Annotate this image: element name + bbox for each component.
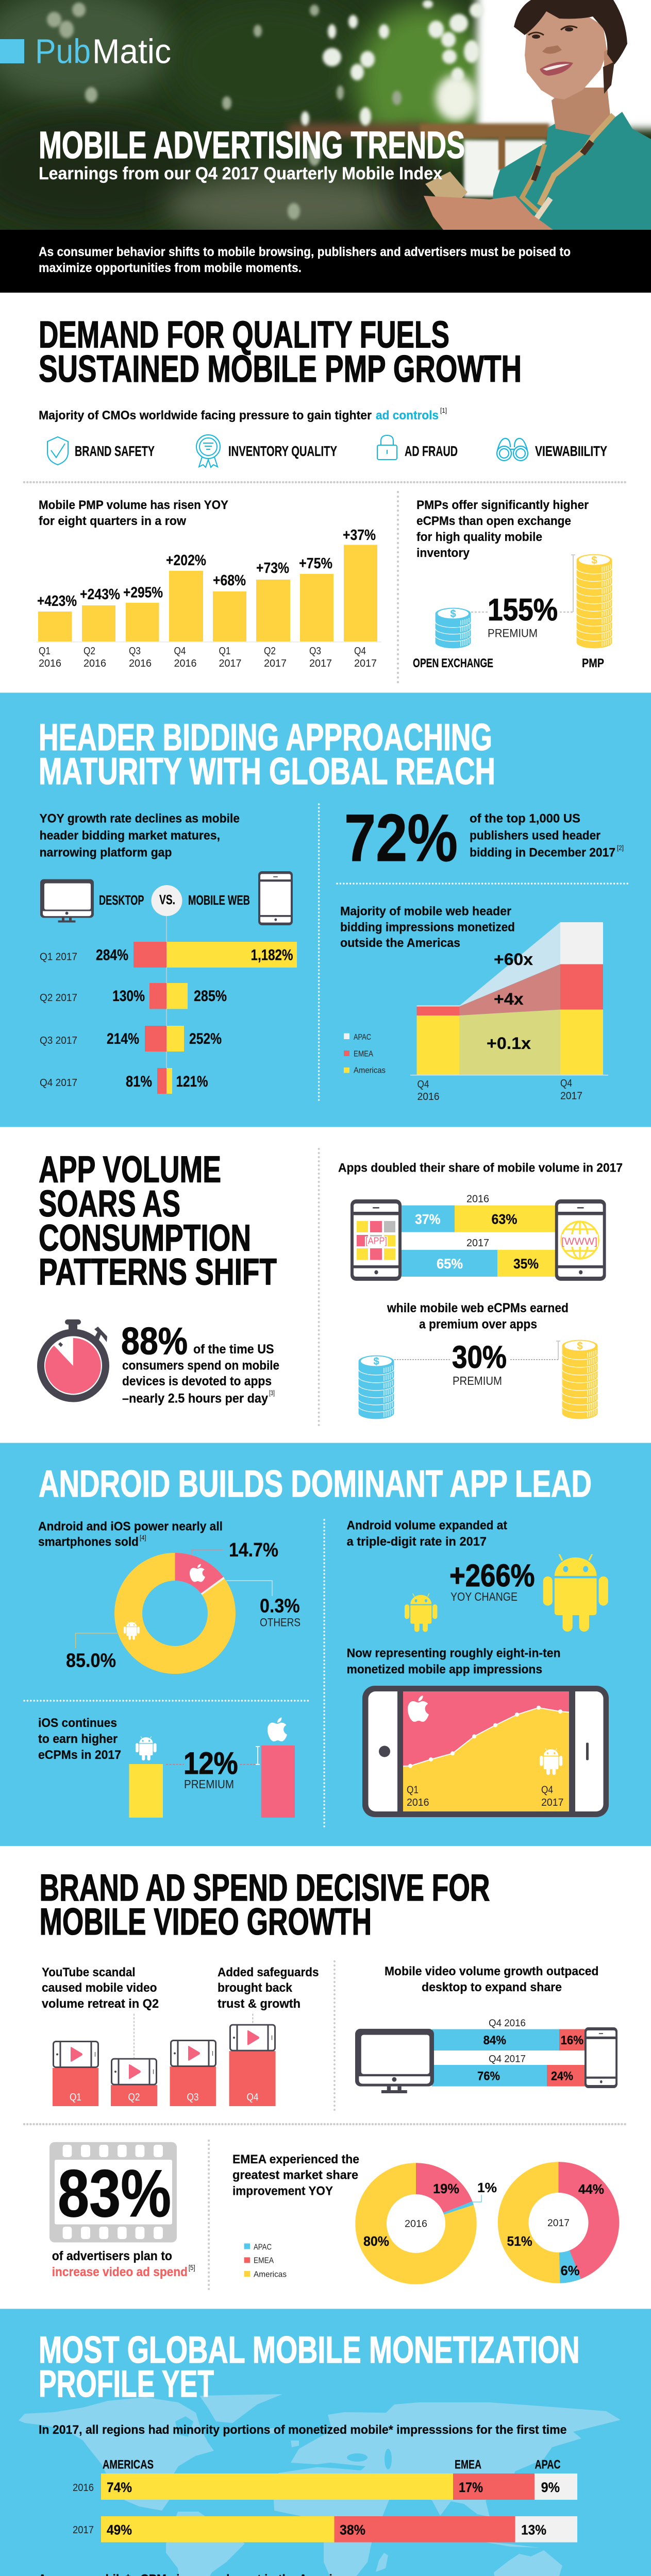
donut chart: smartphone OS share: OTHERS <box>260 1616 301 1629</box>
film strip stat: 83%: 83% <box>58 2156 171 2231</box>
stat: 88% of time: [3] <box>269 1389 275 1397</box>
CMO subheading: Majority of CMOs worldwide facing pressure to gain tighter <box>39 409 372 422</box>
bar chart: quarterly video volume: Q4 <box>246 2092 259 2103</box>
icon: small android <box>405 1594 437 1632</box>
donut chart: smartphone OS share <box>66 1539 301 1674</box>
stacked bars: regional share: APAC <box>535 2458 561 2471</box>
CMO subheading: [1] <box>440 406 447 414</box>
vs header <box>99 885 250 916</box>
icon: app phone: [APP] <box>365 1236 387 1246</box>
legend: regions: Americas <box>254 2270 287 2279</box>
stat: 72%: publishers used header <box>470 829 600 843</box>
stat: 88% of time: of the time US <box>193 1342 274 1357</box>
bar chart: PMP volume: +423% <box>37 593 77 609</box>
section 5 heading: BRAND AD SPEND DECISIVE FOR <box>39 1867 490 1909</box>
text: eight in ten: Now representing roughly eight-in-ten <box>347 1647 561 1660</box>
phone area chart: android share: Q4 <box>541 1784 553 1795</box>
bar chart: PMP volume: +75% <box>299 555 332 572</box>
stat: 88% of time: devices is devoted to apps <box>122 1374 272 1388</box>
bar chart: PMP volume: 2017 <box>354 658 377 669</box>
text: eight in ten <box>347 1647 561 1676</box>
stat: 155% premium: PREMIUM <box>488 626 538 640</box>
bars: iOS premium: PREMIUM <box>184 1777 234 1791</box>
section 5 heading: MOBILE VIDEO GROWTH <box>39 1901 372 1943</box>
PMP volume heading: Mobile PMP volume has risen YOY <box>39 498 228 512</box>
panel: global monetization <box>0 2309 651 2576</box>
stacked area chart: +4x <box>494 990 524 1008</box>
text: EMEA improvement: improvement YOY <box>232 2184 333 2198</box>
icon: mobile phone <box>258 871 293 925</box>
text: minority portions: In 2017, all regions had minority portions of monetized mobile* impresssions for the first time <box>39 2423 567 2437</box>
text: eight in ten: monetized mobile app impressions <box>347 1663 542 1676</box>
panel: android <box>0 1443 651 1846</box>
text: majority outside Americas: bidding impressions monetized <box>340 920 515 935</box>
share bars: desktop vs mobile video: Q4 2016 <box>489 2018 526 2029</box>
bar chart: quarterly video volume: Q2 <box>128 2092 140 2103</box>
legend: regions: EMEA <box>354 1050 373 1058</box>
stacked bars: regional share: 74% <box>107 2480 132 2495</box>
icon row: ad controls <box>47 435 607 467</box>
donut chart: smartphone OS share: 85.0% <box>66 1650 116 1672</box>
intro band: maximize opportunities from mobile moments. <box>39 261 302 275</box>
bar chart: PMP volume: 2017 <box>219 658 241 669</box>
text: mobile web premium: a premium over apps <box>419 1317 537 1332</box>
label: PMP: PMP <box>582 656 604 670</box>
icon: binoculars <box>497 438 528 461</box>
film strip stat: 83% <box>49 2142 177 2242</box>
share bars: desktop vs mobile video: 16% <box>561 2033 583 2047</box>
bar chart: PMP volume: Q3 <box>309 646 321 657</box>
stacked bars: regional share: 17% <box>459 2480 483 2495</box>
bar chart: PMP volume: Q4 <box>174 646 186 657</box>
bar chart: quarterly video volume: Q3 <box>187 2092 199 2103</box>
phone area chart: android share: Q1 <box>407 1784 419 1795</box>
PMP premium text: eCPMs than open exchange <box>416 514 571 528</box>
stat: 72%: [2] <box>617 844 624 852</box>
heading: MATURITY WITH GLOBAL REACH <box>39 751 495 792</box>
stat: 72%: 72% <box>344 800 458 875</box>
stat: 72%: of the top 1,000 US <box>470 812 580 825</box>
stat: 88% of time: 88% <box>121 1320 188 1362</box>
coin stack: mobile web: $ <box>577 1341 583 1352</box>
coin stack: open exchange: $ <box>450 608 456 620</box>
phone area chart: android share <box>362 1686 609 1817</box>
donut chart: 2016: 1% <box>477 2180 497 2195</box>
bar chart: PMP volume: Q2 <box>264 646 276 657</box>
logo: PubMatic: Pub <box>35 32 91 71</box>
text: advertisers plan: [5] <box>189 2263 195 2272</box>
text: majority outside Americas <box>340 905 515 950</box>
bar chart: PMP volume: 2017 <box>309 658 332 669</box>
text: majority outside Americas: outside the Americas <box>340 936 460 950</box>
text: EMEA improvement <box>232 2153 359 2198</box>
donut chart: 2017: 44% <box>578 2181 604 2197</box>
share bars: app vs web: 37% <box>415 1212 441 1227</box>
section 3 heading: SOARS AS <box>39 1183 180 1225</box>
stat: +266%: YOY CHANGE <box>450 1590 518 1603</box>
text: android and ios: smartphones sold <box>38 1535 139 1549</box>
stacked area chart: +0.1x <box>487 1034 531 1053</box>
stat: 30% premium: PREMIUM <box>453 1374 502 1387</box>
text: video vs desktop: desktop to expand share <box>422 1980 562 1994</box>
diverging bar chart: desktop vs mobile web: 81% <box>126 1073 152 1090</box>
stacked bars: regional share: AMERICAS <box>103 2458 154 2471</box>
text: YOY growth: narrowing platform gap <box>39 846 172 860</box>
diverging bar chart: desktop vs mobile web: 284% <box>96 947 128 964</box>
text: video vs desktop: Mobile video volume growth outpaced <box>385 1964 599 1978</box>
text: android volume: Android volume expanded at <box>347 1519 507 1533</box>
share bars: desktop vs mobile video: 24% <box>551 2070 573 2083</box>
bar chart: PMP volume: Q1 <box>39 646 51 657</box>
label: viewability: VIEWABIILITY <box>535 443 607 459</box>
text: android and ios <box>38 1520 223 1549</box>
stat: 30% premium <box>452 1340 507 1387</box>
donut chart: smartphone OS share: 14.7% <box>229 1539 278 1561</box>
bar chart: PMP volume: 2016 <box>84 658 106 669</box>
vs header: MOBILE WEB <box>188 892 250 908</box>
stat: +266%: +266% <box>449 1558 535 1593</box>
donut chart: smartphone OS share: 0.3% <box>260 1595 300 1617</box>
phone area chart: android share: 2017 <box>541 1797 564 1808</box>
share bars: app vs web: 2016 <box>466 1194 489 1205</box>
bar chart: PMP volume: +202% <box>166 552 206 569</box>
share bars: app vs web: 35% <box>513 1256 539 1272</box>
section 5 heading <box>39 1867 490 1943</box>
PMP volume heading <box>39 498 228 528</box>
stacked bars: regional share: 2016 <box>73 2482 94 2494</box>
text: majority outside Americas: Majority of mobile web header <box>340 905 511 919</box>
vs header: DESKTOP <box>99 892 144 908</box>
bar chart: PMP volume: Q1 <box>219 646 231 657</box>
stacked area chart: Q4 <box>560 1078 572 1089</box>
stat: 72% <box>344 800 624 875</box>
section 1 heading <box>39 314 522 390</box>
stat: 88% of time: consumers spend on mobile <box>122 1358 279 1372</box>
icon: shield <box>47 437 68 465</box>
text: EMEA improvement: greatest market share <box>232 2168 358 2182</box>
label: ad fraud: AD FRAUD <box>405 443 458 459</box>
stat: +266% <box>449 1558 535 1603</box>
text: android and ios: [4] <box>140 1534 146 1541</box>
stacked bars: regional share: 49% <box>107 2522 132 2538</box>
text: added safeguards: trust & growth <box>218 1997 301 2011</box>
stacked area chart: Q4 <box>418 1079 429 1090</box>
heading <box>39 717 495 792</box>
stacked bars: regional share <box>73 2458 577 2543</box>
intro band: As consumer behavior shifts to mobile browsing, publishers and advertisers must be poised to <box>39 245 571 259</box>
stacked bars: regional share: 13% <box>521 2522 546 2538</box>
PMP premium text <box>416 498 589 560</box>
diverging bar chart: desktop vs mobile web: Q2 2017 <box>40 992 77 1004</box>
diverging bar chart: desktop vs mobile web <box>40 916 297 1094</box>
share bars: desktop vs mobile video: 76% <box>477 2070 500 2083</box>
legend: regions: APAC <box>354 1033 371 1042</box>
stat: 155% premium: 155% <box>488 592 558 627</box>
legend: regions <box>244 2243 287 2279</box>
donut chart: 2016: 2016 <box>405 2219 427 2230</box>
stacked bars: regional share: 2017 <box>73 2524 94 2536</box>
text: YouTube scandal: YouTube scandal <box>42 1965 136 1979</box>
legend: regions: Americas <box>354 1066 386 1075</box>
bar chart: PMP volume: +243% <box>80 586 120 603</box>
PMP premium text: PMPs offer significantly higher <box>416 498 589 512</box>
icon: lock <box>377 435 397 460</box>
stat: 30% premium: 30% <box>452 1340 507 1375</box>
PMP volume heading: for eight quarters in a row <box>39 514 186 528</box>
share bars: desktop vs mobile video: 84% <box>483 2033 506 2047</box>
bar chart: PMP volume: +37% <box>343 527 376 544</box>
text: YouTube scandal <box>42 1965 159 2011</box>
share bars: app vs web: 65% <box>437 1256 463 1272</box>
icon: stopwatch <box>41 1319 107 1398</box>
PMP premium text: inventory <box>416 546 470 560</box>
bar chart: quarterly video volume: Q1 <box>70 2092 81 2103</box>
section 3 heading <box>39 1149 277 1293</box>
share bars: app vs web: 2017 <box>466 1238 489 1249</box>
bars: iOS premium <box>129 1718 295 1818</box>
legend: regions: EMEA <box>254 2257 274 2265</box>
text: mobile web premium: while mobile web eCPMs earned <box>387 1301 569 1315</box>
coin comparison: apps vs web <box>358 1340 598 1419</box>
stacked bars: regional share: 38% <box>340 2522 365 2538</box>
coin comparison: open exchange vs PMP <box>413 554 612 670</box>
logo: PubMatic: Matic <box>92 32 171 71</box>
text: YOY growth: header bidding market matures, <box>39 829 220 843</box>
diverging bar chart: desktop vs mobile web: 1,182% <box>251 947 293 964</box>
coin stack: open exchange <box>435 607 471 649</box>
icon: web phone: [WWW] <box>561 1236 597 1247</box>
bar chart: PMP volume: Q2 <box>84 646 95 657</box>
text: iOS continues: to earn higher <box>38 1732 118 1746</box>
stat: 155% premium <box>488 592 558 640</box>
text: YOY growth: YOY growth rate declines as mobile <box>39 812 240 825</box>
share bars: app vs web: 63% <box>492 1212 518 1227</box>
woman <box>424 0 651 230</box>
legend: regions: APAC <box>254 2243 272 2251</box>
bar chart: PMP volume: +295% <box>123 584 163 601</box>
world map <box>19 2394 621 2576</box>
heading <box>39 2329 579 2405</box>
PMP premium text: for high quality mobile <box>416 530 542 544</box>
coin stack: PMP: $ <box>591 555 597 566</box>
section 3 heading: CONSUMPTION <box>39 1218 251 1259</box>
text: advertisers plan: of advertisers plan to <box>52 2249 172 2263</box>
stacked area chart: +60x <box>494 950 533 969</box>
section 1 heading: DEMAND FOR QUALITY FUELS <box>39 314 449 355</box>
donut chart: 2016: 80% <box>363 2233 389 2249</box>
bar chart: PMP volume <box>37 527 381 669</box>
text: android volume <box>347 1519 507 1549</box>
bar chart: PMP volume: 2017 <box>264 658 287 669</box>
vs header: VS. <box>159 892 175 907</box>
coin stack: apps <box>358 1355 394 1419</box>
stat: 72%: bidding in December 2017 <box>470 846 615 860</box>
text: EMEA improvement: EMEA experienced the <box>232 2153 359 2166</box>
bars: iOS premium: 12% <box>183 1746 238 1781</box>
intro band <box>0 230 651 293</box>
bar chart: PMP volume: Q4 <box>354 646 366 657</box>
coin stack: apps: $ <box>373 1356 379 1367</box>
icon: web phone <box>555 1199 606 1281</box>
bar chart: PMP volume: 2016 <box>174 658 197 669</box>
label: brand safety: BRAND SAFETY <box>75 443 155 459</box>
diverging bar chart: desktop vs mobile web: 214% <box>107 1030 139 1047</box>
icon: ribbon <box>196 435 220 467</box>
heading: HEADER BIDDING APPROACHING <box>39 717 492 758</box>
section 3 heading: APP VOLUME <box>39 1149 221 1190</box>
share bars: desktop vs mobile video <box>355 2018 617 2093</box>
text: YouTube scandal: caused mobile video <box>42 1981 157 1995</box>
panel: header bidding <box>0 692 651 1127</box>
diverging bar chart: desktop vs mobile web: Q4 2017 <box>40 1077 77 1089</box>
diverging bar chart: desktop vs mobile web: 130% <box>112 988 145 1005</box>
stacked bars: regional share: EMEA <box>455 2458 481 2471</box>
text: iOS continues: eCPMs in 2017 <box>38 1748 121 1762</box>
title <box>39 124 465 183</box>
title: Learnings from our Q4 2017 Quarterly Mobile Index <box>39 164 442 183</box>
stacked area chart: 2016 <box>418 1091 439 1103</box>
icon: app phone <box>350 1199 402 1281</box>
legend: regions <box>344 1033 386 1075</box>
stacked area chart <box>410 922 608 1103</box>
diverging bar chart: desktop vs mobile web: Q1 2017 <box>40 952 77 963</box>
diverging bar chart: desktop vs mobile web: Q3 2017 <box>40 1035 77 1046</box>
diverging bar chart: desktop vs mobile web: 121% <box>176 1073 208 1090</box>
coin stack: PMP <box>576 554 612 649</box>
heading: PROFILE YET <box>39 2363 214 2405</box>
text: advertisers plan <box>52 2249 195 2279</box>
bar chart: PMP volume: 2016 <box>39 658 61 669</box>
bar chart: PMP volume: Q3 <box>129 646 141 657</box>
logo: PubMatic <box>0 32 171 71</box>
text: YouTube scandal: volume retreat in Q2 <box>42 1997 159 2011</box>
heading: apps doubled: Apps doubled their share of mobile volume in 2017 <box>338 1161 623 1175</box>
label: open exchange: OPEN EXCHANGE <box>413 656 493 670</box>
text: android volume: a triple-digit rate in 2017 <box>347 1535 487 1549</box>
coin stack: mobile web <box>562 1340 598 1419</box>
text: added safeguards: Added safeguards <box>218 1965 319 1979</box>
text: YOY growth <box>39 812 240 860</box>
donut chart: 2017: 6% <box>561 2263 579 2278</box>
share bars: app vs web <box>402 1194 555 1277</box>
donut chart: 2016: 19% <box>433 2181 459 2196</box>
label: inventory quality: INVENTORY QUALITY <box>228 443 337 459</box>
stacked area chart: 2017 <box>560 1090 582 1101</box>
text: advertisers plan: increase video ad spend <box>52 2265 188 2279</box>
stacked bars: regional share: 9% <box>541 2480 560 2495</box>
section 3 heading: PATTERNS SHIFT <box>39 1252 277 1293</box>
donut chart: 2017: 2017 <box>547 2218 570 2229</box>
bar chart: PMP volume: +73% <box>256 560 289 577</box>
diverging bar chart: desktop vs mobile web: 285% <box>194 988 227 1005</box>
CMO subheading: ad controls <box>376 409 439 422</box>
donut chart: 2017: 51% <box>507 2233 532 2249</box>
icon: desktop <box>40 879 94 922</box>
text: added safeguards: brought back <box>218 1981 293 1995</box>
bar chart: PMP volume: +68% <box>213 572 246 589</box>
phone area chart: android share: 2016 <box>407 1797 429 1808</box>
donut chart: 2016 <box>355 2163 497 2284</box>
stat: 88% of time <box>121 1320 279 1406</box>
text: android and ios: Android and iOS power nearly all <box>38 1520 223 1533</box>
text: iOS continues: iOS continues <box>38 1716 117 1730</box>
text: iOS continues <box>38 1716 121 1762</box>
bar chart: quarterly video volume <box>53 2013 276 2106</box>
text: video vs desktop <box>385 1964 599 1994</box>
hero photo banner <box>0 0 651 237</box>
text: mobile web premium <box>387 1301 569 1332</box>
stat: 88% of time: –nearly 2.5 hours per day <box>122 1392 268 1406</box>
bar chart: PMP volume: 2016 <box>129 658 152 669</box>
text: added safeguards <box>218 1965 319 2011</box>
title: MOBILE ADVERTISING TRENDS <box>39 124 465 166</box>
diverging bar chart: desktop vs mobile web: 252% <box>189 1030 222 1047</box>
donut chart: 2017 <box>498 2162 619 2283</box>
share bars: desktop vs mobile video: Q4 2017 <box>489 2054 526 2065</box>
icon: large android <box>543 1554 608 1632</box>
